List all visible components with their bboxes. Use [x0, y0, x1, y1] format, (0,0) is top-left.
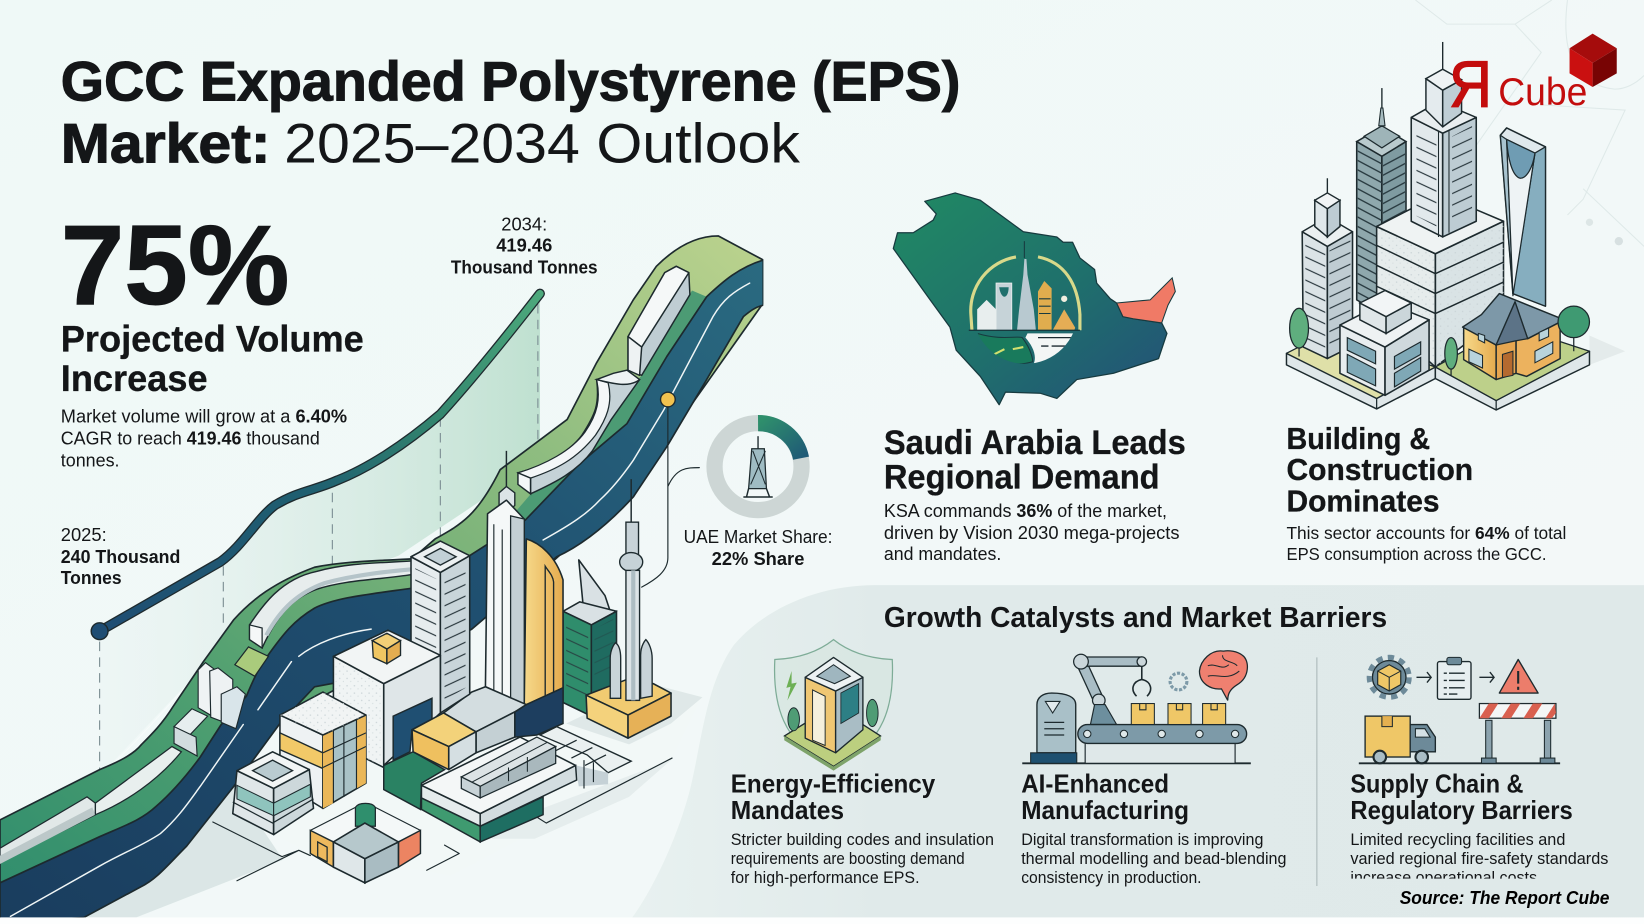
green floor — [384, 752, 445, 809]
title: 2025–2034 Outlook — [284, 113, 800, 175]
upper wall segment — [628, 266, 690, 375]
block: building and construction dominates: Construction — [1286, 453, 1473, 487]
donut chart — [715, 423, 802, 510]
column: AI-enhanced manufacturing: consistency in production. — [1021, 868, 1202, 887]
title: GCC Expanded Polystyrene (EPS) — [61, 51, 960, 113]
house — [1463, 294, 1564, 380]
chart: growth line with dashed drop lines — [91, 294, 540, 776]
label: 2034 value: 2034: — [501, 214, 547, 235]
large white block — [333, 630, 440, 767]
column: supply chain and regulatory barriers: increase operational costs — [1350, 868, 1537, 887]
green ribbon — [0, 236, 763, 912]
green tower with fin — [563, 560, 616, 716]
label: 2025 value: Tonnes — [61, 567, 122, 588]
block: building and construction dominates: Dominates — [1286, 485, 1440, 519]
stat: 75 percent projected volume increase: Market volume will grow at a 6.40% — [61, 406, 347, 427]
navy ribbon — [0, 260, 763, 924]
block: Saudi Arabia leads: Regional Demand — [884, 459, 1160, 497]
block: building and construction dominates — [1286, 422, 1566, 564]
stat: 75 percent projected volume increase — [61, 201, 364, 471]
stat: 75 percent projected volume increase: 75% — [61, 201, 289, 328]
platform — [1286, 325, 1589, 410]
kingdom-style tower — [1500, 128, 1545, 306]
icon: AI manufacturing line — [1022, 651, 1251, 763]
background network lines — [1415, 0, 1644, 246]
open courtyard block — [310, 802, 420, 883]
spotted block with yellow bands — [280, 692, 366, 808]
dark striped tower — [1357, 88, 1406, 315]
UAE highlight — [1117, 278, 1175, 323]
column: AI-enhanced manufacturing — [1021, 771, 1286, 887]
yellow cube block — [412, 713, 476, 770]
column: supply chain and regulatory barriers: varied regional fire-safety standards — [1350, 849, 1608, 868]
block: Saudi Arabia leads: Saudi Arabia Leads — [884, 424, 1186, 462]
logo: RCube — [1449, 34, 1617, 121]
logo: RCube: Я — [1449, 47, 1492, 121]
divider — [1316, 657, 1318, 886]
illustration: building and construction cluster — [1286, 42, 1625, 410]
panel heading: Growth Catalysts and Market Barriers — [884, 601, 1387, 633]
column: energy-efficiency mandates: Energy-Efficiency — [731, 771, 936, 799]
column: AI-enhanced manufacturing: AI-Enhanced — [1021, 771, 1169, 799]
darker green strip beside road — [514, 290, 707, 520]
title — [61, 51, 960, 175]
column: energy-efficiency mandates: for high-performance EPS. — [731, 868, 920, 887]
stat: 75 percent projected volume increase: CAGR to reach 419.46 thousand — [61, 428, 320, 449]
title: Market: — [61, 113, 271, 175]
logo: RCube: Cube — [1498, 71, 1587, 114]
marker and callout: UAE market share: UAE Market Share: — [684, 526, 832, 547]
lower curved wall — [235, 561, 412, 676]
label: 2025 value — [61, 524, 180, 588]
illustration: isometric city — [213, 451, 702, 883]
column: energy-efficiency mandates: Mandates — [731, 797, 844, 825]
small glass block — [233, 752, 313, 835]
gray base block — [444, 687, 526, 753]
central high-rise — [1411, 42, 1476, 237]
striped tower — [411, 541, 470, 713]
column: supply chain and regulatory barriers: Supply Chain & — [1350, 771, 1523, 799]
block: building and construction dominates: Building & — [1286, 422, 1430, 456]
map: Saudi Arabia and UAE — [893, 193, 1175, 405]
column: AI-enhanced manufacturing: thermal modelling and bead-blending — [1021, 849, 1286, 868]
column: AI-enhanced manufacturing: Manufacturing — [1021, 797, 1189, 825]
column: energy-efficiency mandates: requirements are boosting demand — [731, 849, 965, 868]
long factory block — [421, 737, 577, 842]
illustration: rising road ribbon — [0, 236, 763, 924]
block: Saudi Arabia leads: driven by Vision 2030 mega-projects — [884, 522, 1180, 543]
broadcast tower on yellow base — [586, 479, 671, 738]
road centre line — [10, 283, 750, 916]
small office building — [1340, 290, 1429, 395]
column: energy-efficiency mandates: Stricter building codes and insulation — [731, 830, 994, 849]
tall tower with gold facade — [485, 451, 563, 737]
small yellow cube — [372, 633, 401, 664]
block: Saudi Arabia leads: KSA commands 36% of the market, — [884, 500, 1167, 521]
label: 2034 value: 419.46 — [496, 235, 552, 256]
stat: 75 percent projected volume increase: Projected Volume — [61, 318, 364, 359]
icon: supply chain and barrier — [1359, 657, 1560, 763]
curved wall segment — [518, 370, 640, 494]
block: building and construction dominates: This sector accounts for 64% of total — [1286, 523, 1566, 543]
ground shadow wedge — [84, 786, 283, 917]
label: 2034 value — [451, 214, 598, 278]
block: Saudi Arabia leads — [884, 424, 1186, 564]
ground lines — [213, 758, 672, 881]
blocks on the ribbon — [174, 663, 245, 756]
logo cube — [1570, 34, 1617, 87]
label: 2025 value: 2025: — [61, 524, 107, 545]
icon: energy efficient building in shield — [775, 640, 893, 771]
ground plate — [241, 655, 702, 875]
block: building and construction dominates: EPS consumption across the GCC. — [1286, 544, 1546, 564]
source note: Source: The Report Cube — [1400, 887, 1609, 908]
column: supply chain and regulatory barriers: Regulatory Barriers — [1350, 797, 1573, 825]
marker and callout: UAE market share: 22% Share — [712, 548, 804, 569]
marker and callout: UAE market share — [642, 392, 832, 587]
label: 2025 value: 240 Thousand — [61, 546, 180, 567]
stat: 75 percent projected volume increase: Increase — [61, 358, 208, 399]
striped roof annex — [540, 727, 631, 788]
column: supply chain and regulatory barriers — [1350, 771, 1608, 887]
lower road strip — [0, 747, 181, 864]
block: Saudi Arabia leads: and mandates. — [884, 543, 1001, 564]
column: energy-efficiency mandates — [731, 771, 994, 887]
marble block — [1377, 209, 1504, 367]
label: 2034 value: Thousand Tonnes — [451, 257, 598, 278]
circular skyline emblem — [969, 241, 1080, 366]
bottom panel background — [632, 585, 1644, 917]
column: supply chain and regulatory barriers: Limited recycling facilities and — [1350, 830, 1565, 849]
left high-rise — [1302, 178, 1353, 359]
trees — [1290, 306, 1589, 375]
stat: 75 percent projected volume increase: tonnes. — [61, 450, 120, 471]
column: AI-enhanced manufacturing: Digital transformation is improving — [1021, 830, 1263, 849]
